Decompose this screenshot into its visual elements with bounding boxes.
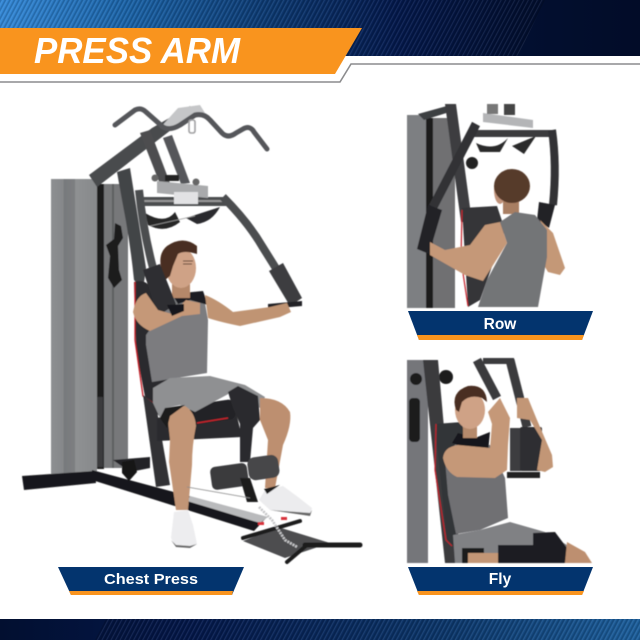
caption text: Chest Press — [104, 571, 198, 588]
shorts — [153, 376, 265, 418]
red seat trim — [135, 282, 153, 403]
man's left arm and hand — [133, 293, 200, 331]
left handle — [167, 304, 184, 316]
head — [454, 386, 487, 438]
right arm pad — [269, 263, 302, 306]
cable pulleys — [409, 370, 453, 442]
head — [494, 169, 530, 214]
press cross mechanism — [143, 174, 227, 229]
seat back — [462, 206, 505, 307]
mechanism — [466, 104, 555, 169]
right press arm — [223, 197, 277, 270]
near shoe — [171, 510, 197, 548]
man's right arm — [205, 295, 291, 326]
red trim — [461, 210, 468, 306]
seat post — [143, 395, 170, 487]
back pad — [134, 281, 170, 420]
collar — [172, 291, 208, 305]
far leg — [565, 542, 592, 563]
title: PRESS ARM — [34, 30, 241, 71]
right pad — [537, 202, 555, 228]
arm pads — [507, 427, 542, 478]
thigh — [468, 553, 498, 563]
carabiner — [189, 120, 195, 133]
press arms — [477, 360, 527, 427]
floor cable — [187, 487, 250, 498]
caption: row — [408, 311, 593, 340]
frame column — [423, 360, 456, 563]
base rail — [92, 457, 268, 531]
red trim — [435, 424, 452, 546]
tank top — [478, 212, 547, 307]
far shoe — [259, 485, 312, 516]
rear column — [97, 184, 128, 469]
top beam — [89, 105, 205, 187]
chain — [259, 507, 297, 547]
leg rollers — [210, 454, 280, 502]
plate bars — [243, 521, 360, 562]
shroud — [407, 115, 426, 308]
title banner — [0, 28, 362, 74]
far arm — [540, 220, 565, 275]
caption text: Fly — [489, 571, 512, 588]
collar — [452, 432, 490, 452]
left arm pad — [143, 264, 176, 316]
photo: row exercise — [407, 104, 565, 308]
right arm — [552, 130, 555, 205]
caption: fly — [408, 567, 593, 595]
man's near leg — [167, 406, 196, 510]
tank top — [445, 440, 508, 534]
far arm — [517, 398, 553, 472]
man's far leg — [260, 398, 290, 488]
header accent line — [0, 64, 640, 82]
seat — [157, 399, 242, 441]
thigh cuff — [462, 548, 484, 563]
shorts — [453, 522, 567, 563]
frame column — [418, 104, 472, 308]
near arm — [430, 222, 507, 281]
center column — [117, 168, 146, 290]
safety pins — [258, 517, 287, 525]
shroud — [407, 360, 428, 563]
left pad — [417, 205, 442, 254]
seat pad and bracket — [498, 532, 567, 563]
base foot — [22, 471, 96, 490]
left arm — [433, 124, 476, 207]
lat pulldown bar — [115, 109, 267, 149]
caption: chest press — [58, 567, 244, 595]
weight stack shroud — [51, 179, 97, 474]
foot plate — [243, 527, 330, 558]
caption text: Row — [484, 316, 517, 333]
near arm — [443, 398, 510, 478]
photo: fly exercise — [407, 360, 592, 563]
head — [160, 240, 197, 298]
leg bracket — [228, 386, 260, 462]
seat back — [435, 422, 470, 547]
right handle — [268, 301, 302, 309]
tank top — [146, 292, 208, 382]
footer band — [0, 619, 640, 640]
photo: man using chest press on home gym — [22, 105, 360, 562]
shorts cuff — [160, 405, 185, 428]
header band — [0, 0, 640, 56]
left press arm — [139, 190, 153, 268]
